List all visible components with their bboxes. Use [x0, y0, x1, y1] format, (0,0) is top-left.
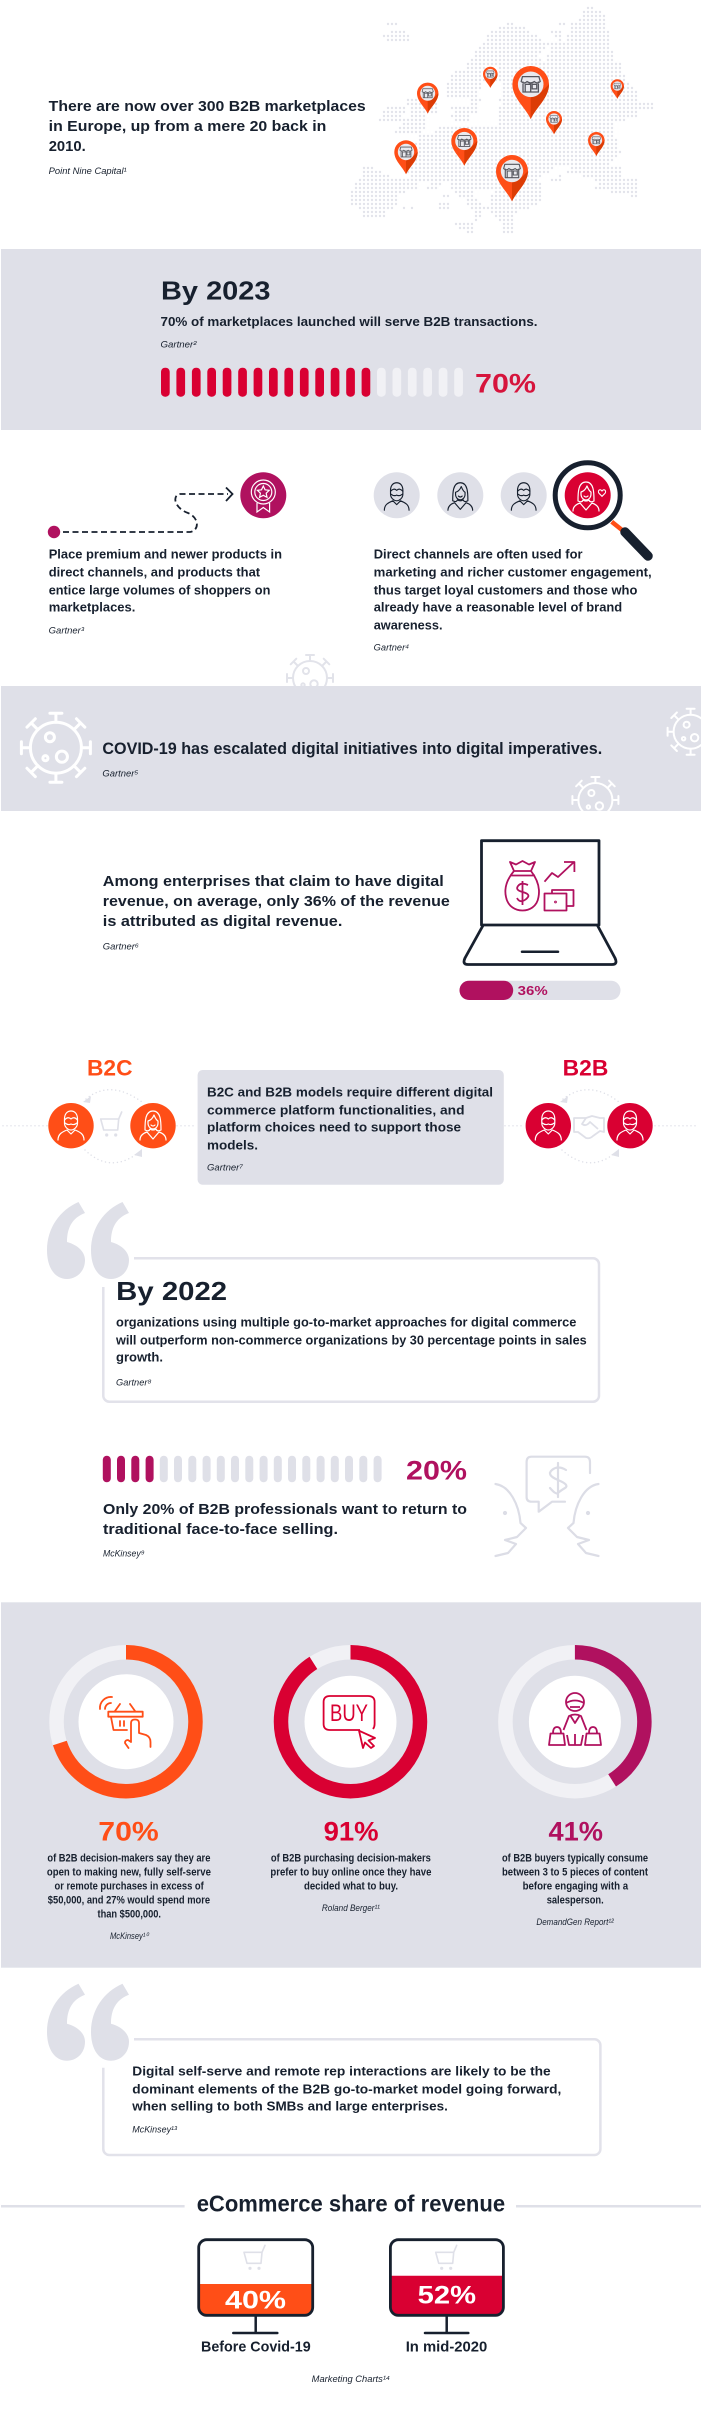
text: place premium: marketplaces.: [49, 600, 135, 614]
source: Marketing Charts 14: Marketing Charts¹⁴: [312, 2374, 390, 2384]
label: B2C: B2C: [87, 1056, 133, 1081]
source: Gartner 3: Gartner³: [49, 626, 85, 636]
source: Gartner 8: Gartner⁸: [116, 1378, 152, 1388]
source: McKinsey 10: McKinsey¹⁰: [110, 1931, 150, 1941]
stat: 70 percent: [47, 1652, 211, 1941]
text: digital revenue: [103, 873, 450, 930]
caption: of B2B purchasing decision-makers: [271, 1853, 431, 1865]
source: Gartner 5: Gartner⁵: [102, 769, 139, 779]
source: McKinsey 9: McKinsey⁹: [103, 1549, 145, 1559]
value: 70%: 70%: [98, 1817, 159, 1847]
text: place premium: [49, 546, 282, 614]
pin markers: [394, 66, 624, 201]
block: direct channels premium products: [48, 472, 286, 636]
callout: digital self-serve: [47, 1984, 600, 2155]
icon: shopper with bags: [549, 1693, 601, 1745]
stat: 91 percent: [270, 1652, 431, 1913]
text: direct channels marketing: already have a reasonable level of brand: [374, 600, 622, 614]
monitor: in mid-2020: [390, 2240, 503, 2356]
icon: basket tap: [100, 1697, 150, 1748]
text: digital self-serve: [131, 2063, 561, 2113]
value: 52%: 52%: [418, 2281, 476, 2309]
group: B2C: [48, 1056, 176, 1163]
text: place premium: direct channels, and products that: [49, 564, 261, 580]
text: digital revenue: Among enterprises that claim to have digital: [103, 873, 444, 890]
caption: than $500,000.: [98, 1909, 161, 1921]
heading: By 2022: By 2022: [116, 1276, 227, 1306]
box outline: [103, 2039, 600, 2155]
text: only 20%: Only 20% of B2B professionals want to return to: [103, 1501, 467, 1518]
icon: magnifier on customer: [555, 463, 648, 556]
text: multiple go-to-market: [115, 1315, 587, 1365]
source: Point Nine Capital: Point Nine Capital¹: [49, 166, 127, 176]
donut chart: 70 percent: [56, 1652, 196, 1791]
box outline: [103, 1258, 599, 1402]
donut chart: 91 percent: [281, 1652, 420, 1791]
heading text: 300 B2B marketplaces: There are now over 300 B2B marketplaces: [49, 98, 366, 115]
heading: By 2023: By 2023: [161, 276, 270, 306]
text: multiple go-to-market: will outperform non-commerce organizations by 30 percentage points in sales: [115, 1333, 587, 1348]
label: Before Covid-19: [201, 2339, 311, 2356]
decoration: quote mark: [47, 1202, 129, 1279]
text: direct channels marketing: [374, 546, 652, 632]
text: digital self-serve: Digital self-serve and remote rep interactions are likely to be the: [132, 2063, 551, 2078]
section: European marketplaces: [49, 8, 653, 232]
caption: open to making new, fully self-serve: [47, 1867, 211, 1879]
caption: or remote purchases in excess of: [54, 1881, 204, 1893]
panel: B2C and B2B text: models.: [207, 1138, 258, 1152]
panel: COVID-19: [1, 686, 701, 823]
icon: shopper woman: [130, 1103, 176, 1148]
heading text: 300 B2B marketplaces: in Europe, up from a mere 20 back in: [49, 118, 326, 135]
icon: business man left: [526, 1103, 571, 1148]
monitor: before Covid-19: [199, 2240, 313, 2356]
text: direct channels marketing: Direct channels are often used for: [374, 546, 582, 562]
label: B2B: B2B: [563, 1056, 608, 1081]
progress bar: 36 percent: 36%: [518, 984, 548, 998]
text: multiple go-to-market: growth.: [116, 1350, 163, 1365]
source: DemandGen Report 12: DemandGen Report¹²: [536, 1917, 615, 1927]
caption: of B2B buyers typically consume: [502, 1853, 648, 1865]
label: In mid-2020: [406, 2339, 487, 2356]
icon: cart: [101, 1112, 122, 1136]
panel: By 2023: [1, 249, 701, 430]
value: 20%: 20%: [406, 1455, 467, 1485]
icon: virus above band: [287, 655, 333, 701]
icon: laptop: [464, 841, 616, 964]
text: only 20%: traditional face-to-face selling.: [103, 1521, 338, 1538]
text: digital revenue: revenue, on average, only 36% of the revenue: [103, 893, 450, 910]
block: direct channels customers: [374, 463, 652, 653]
icon: large virus: [21, 713, 90, 782]
source: McKinsey 13: McKinsey¹³: [132, 2125, 178, 2135]
panel: B2C and B2B text: platform choices need to support those: [207, 1120, 461, 1134]
heading: eCommerce share of revenue: [197, 2191, 505, 2217]
panel: B2C and B2B text: B2C and B2B models require different digital: [207, 1084, 493, 1100]
progress bars: 20 percent: [103, 1456, 382, 1482]
stat: 41 percent: [502, 1652, 648, 1927]
source: Gartner 2: Gartner²: [160, 340, 198, 350]
panel: B2C and B2B text: Gartner⁷: [207, 1163, 244, 1173]
icon: two faces talking money: [496, 1457, 598, 1556]
panel: B2C and B2B text: commerce platform functionalities, and: [207, 1102, 465, 1118]
caption: $50,000, and 27% would spend more: [48, 1895, 210, 1907]
text: digital self-serve: dominant elements of the B2B go-to-market model going forward,: [132, 2081, 561, 2096]
heading text: 300 B2B marketplaces: [49, 98, 366, 155]
caption: decided what to buy.: [304, 1881, 398, 1893]
text: direct channels marketing: awareness.: [374, 618, 442, 632]
text: COVID-19: COVID-19 has escalated digital initiatives into digital imperatives.: [102, 740, 602, 758]
block: 20 percent face to face: [103, 1455, 599, 1559]
caption: [47, 1853, 211, 1921]
icon: handshake: [574, 1116, 604, 1138]
map: dotted Europe: [352, 8, 653, 232]
group: B2B: [526, 1056, 653, 1163]
caption: [502, 1853, 648, 1907]
text: direct channels marketing: thus target loyal customers and those who: [374, 582, 637, 598]
icon: buy button: [324, 1696, 375, 1748]
icon: money and growth: [505, 861, 574, 910]
source: Gartner 6: Gartner⁶: [103, 941, 139, 951]
text: direct channels marketing: marketing and richer customer engagement,: [374, 564, 652, 580]
heading text: 300 B2B marketplaces: 2010.: [49, 138, 86, 155]
text: only 20%: [103, 1501, 467, 1538]
icon: right virus: [668, 709, 701, 755]
panel: three statistics: [1, 1602, 701, 1968]
value: 41%: 41%: [548, 1817, 603, 1847]
icon: medal: [240, 472, 286, 518]
value: 40%: 40%: [225, 2286, 286, 2314]
caption: [270, 1853, 431, 1893]
value: 70%: 70%: [475, 369, 536, 399]
icons: three customers: [374, 472, 547, 518]
caption: before engaging with a: [523, 1881, 628, 1893]
section: eCommerce share of revenue: [1, 2191, 701, 2384]
caption: of B2B decision-makers say they are: [47, 1853, 210, 1865]
text: digital revenue: is attributed as digital revenue.: [103, 913, 342, 930]
donut chart: 41 percent: [505, 1652, 644, 1791]
source: Roland Berger 11: Roland Berger¹¹: [322, 1903, 380, 1913]
icon: bottom virus: [572, 776, 620, 811]
block: digital revenue: [103, 841, 621, 1000]
caption: prefer to buy online once they have: [270, 1867, 431, 1879]
caption: salesperson.: [547, 1895, 604, 1907]
progress bars: 70 percent: [161, 368, 463, 397]
block: B2C and B2B: [3, 1056, 698, 1185]
arrow: dashed path: [48, 488, 232, 538]
icon: business man right: [607, 1103, 653, 1148]
text: place premium: entice large volumes of shoppers on: [49, 582, 270, 598]
value: 91%: 91%: [324, 1817, 379, 1847]
callout: By 2022: [47, 1202, 599, 1402]
progress bar: 36 percent: [460, 981, 620, 1000]
caption: between 3 to 5 pieces of content: [502, 1867, 648, 1879]
text: 70% of marketplaces: 70% of marketplaces launched will serve B2B transactions.: [160, 314, 538, 329]
decoration: quote mark: [47, 1984, 129, 2061]
text: digital self-serve: when selling to both SMBs and large enterprises.: [131, 2098, 448, 2113]
icon: shopper man: [48, 1103, 94, 1148]
panel: B2C and B2B text: [198, 1070, 504, 1185]
text: place premium: Place premium and newer products in: [49, 546, 282, 562]
text: multiple go-to-market: organizations using multiple go-to-market approaches for digital commerce: [116, 1315, 576, 1330]
source: Gartner 4: Gartner⁴: [374, 643, 409, 653]
icon: buy button: BUY: [330, 1700, 368, 1727]
